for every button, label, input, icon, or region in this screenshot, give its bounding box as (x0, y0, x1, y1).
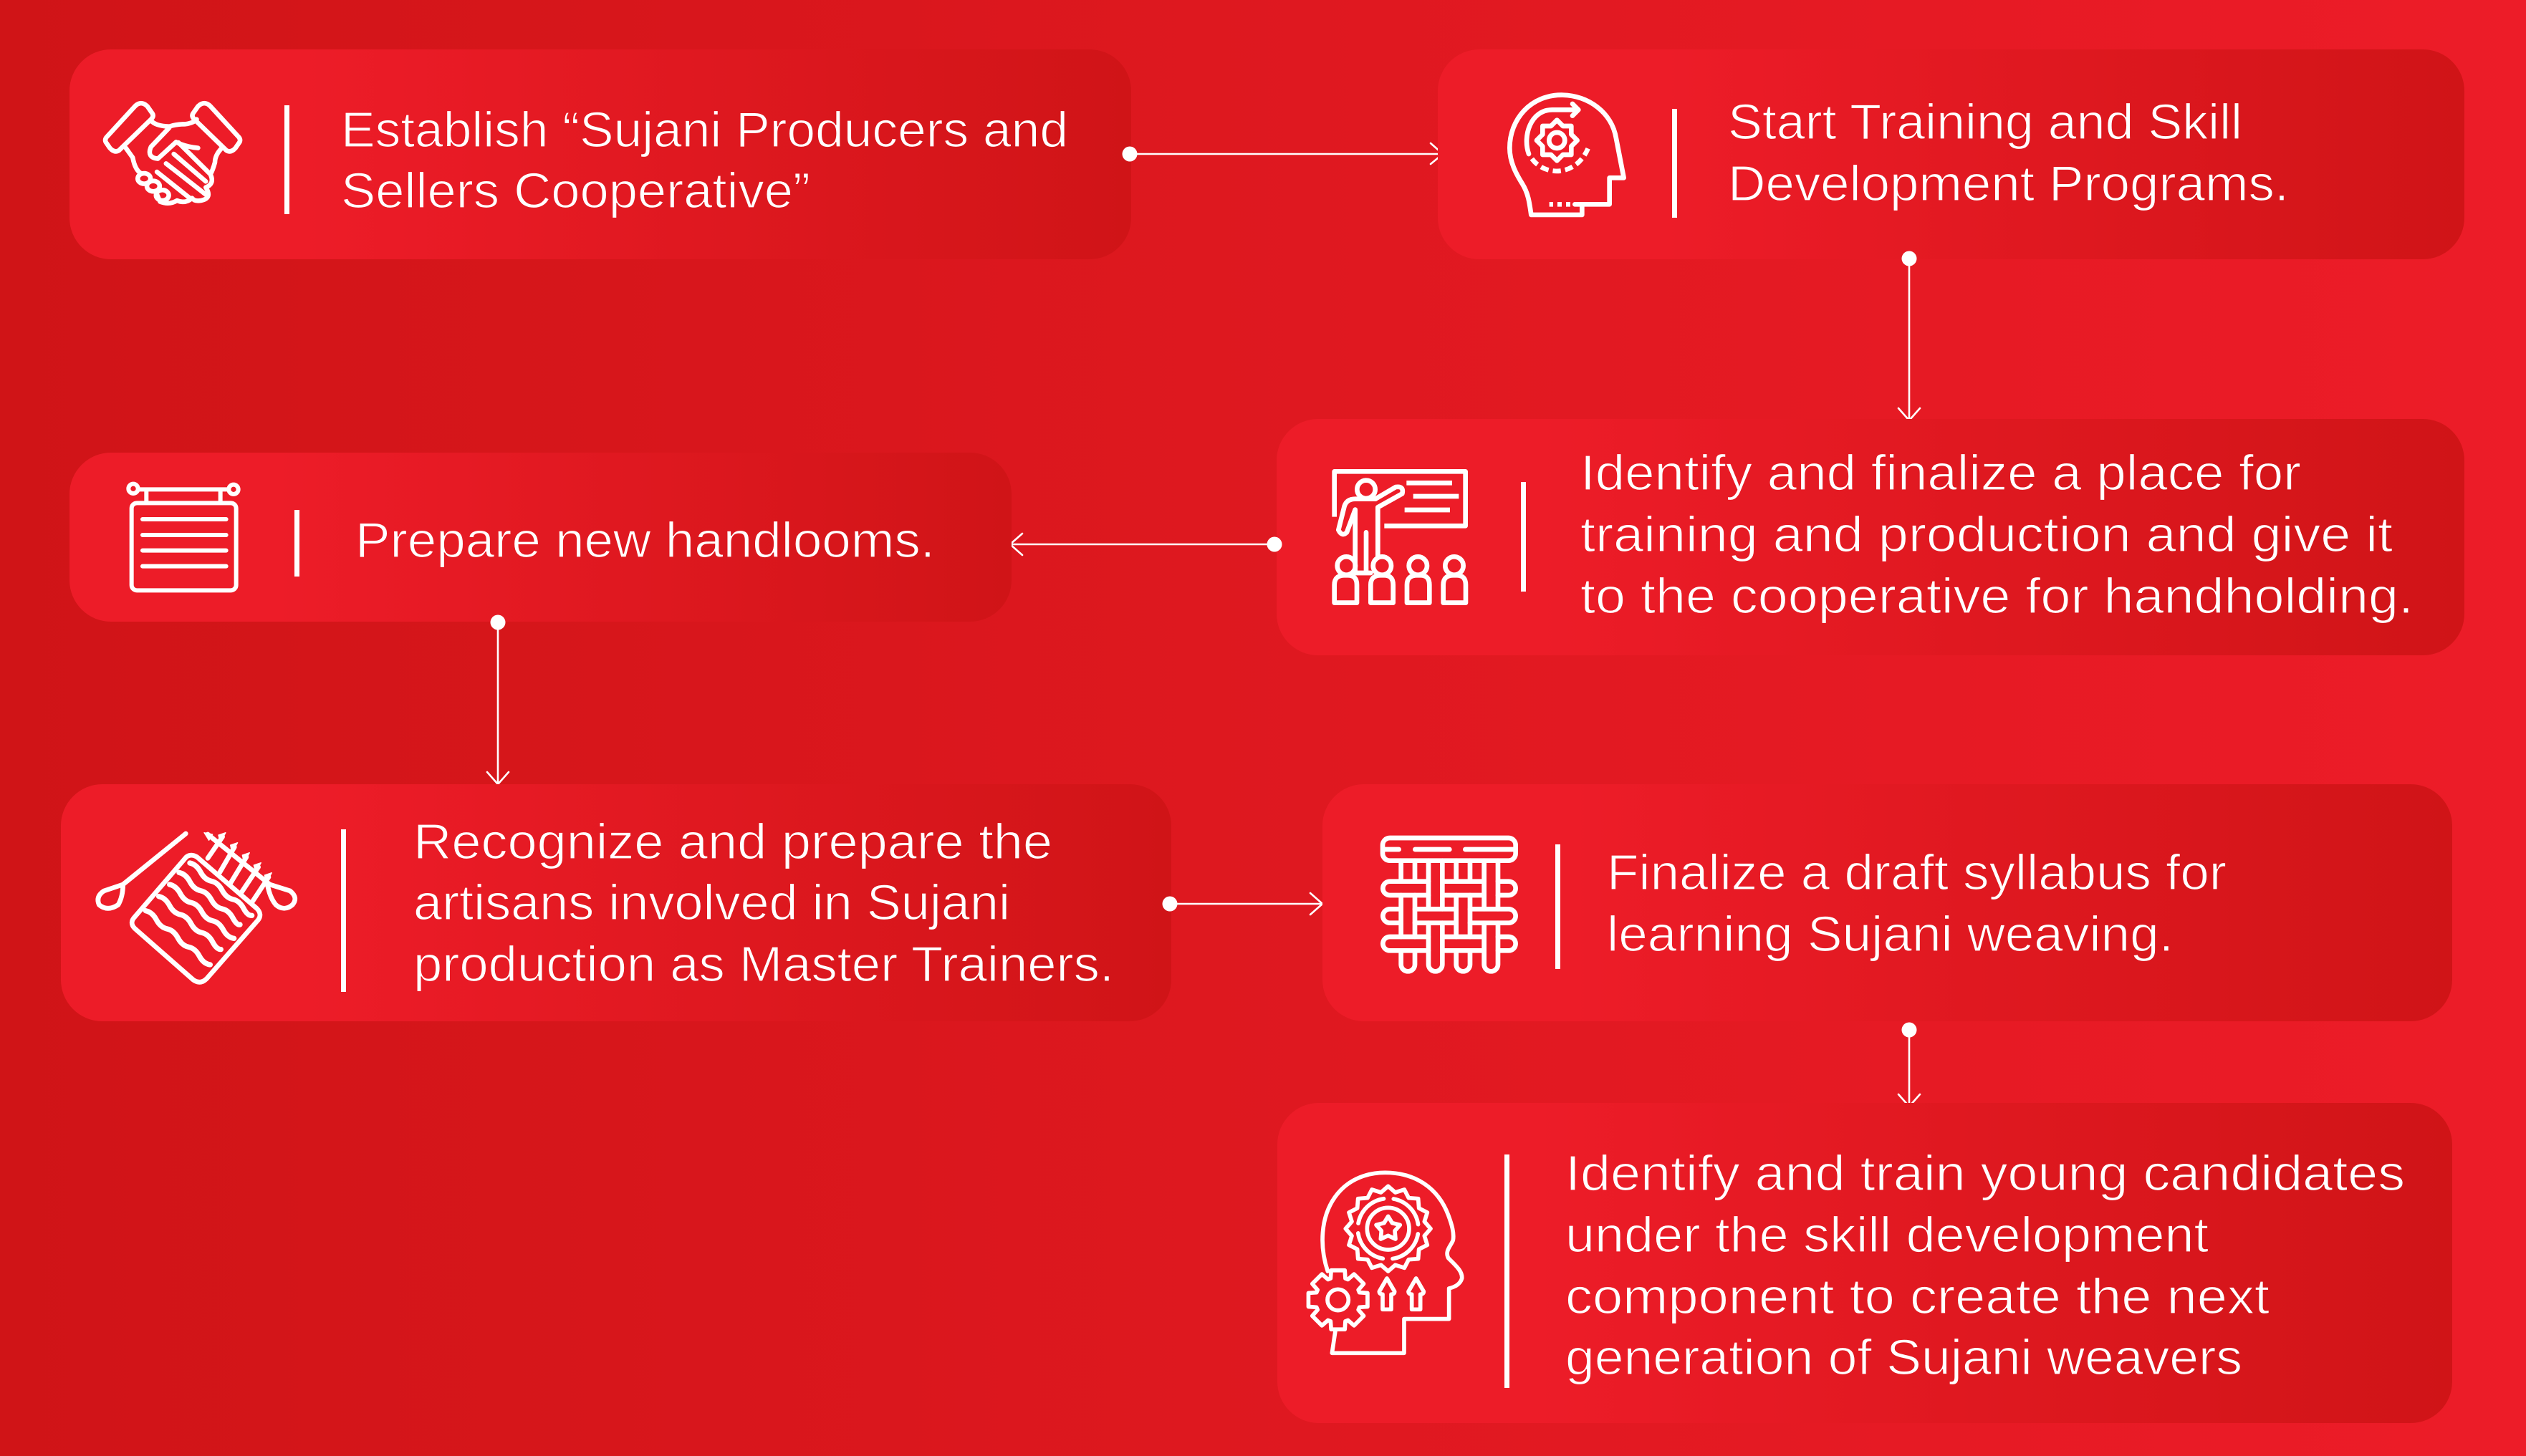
panel: training programs (1438, 49, 2464, 259)
arrow: training to place (1898, 251, 1920, 420)
arrow: syllabus to candidates (1898, 1023, 1920, 1107)
panel: master trainers (61, 784, 1171, 1021)
text: identify place (1580, 445, 2414, 624)
text: master trainers: Recognize and prepare the (413, 814, 1052, 869)
icon: head with badge and gear (1308, 1172, 1462, 1353)
panel background (1277, 1103, 2452, 1423)
text: master trainers (413, 814, 1114, 992)
panel: establish cooperative (69, 49, 1131, 259)
text: identify place: to the cooperative for handholding. (1580, 568, 2414, 624)
text: master trainers: production as Master Trainers. (413, 936, 1114, 992)
text: training programs: Start Training and Skill (1728, 94, 2242, 150)
panel background (1277, 419, 2464, 655)
icon: handshake (105, 103, 240, 203)
arrow: place to handlooms (1010, 534, 1282, 555)
icon: trainer with audience (1335, 471, 1466, 603)
text: young candidates: under the skill development (1565, 1207, 2209, 1263)
text: young candidates: generation of Sujani weavers (1565, 1329, 2242, 1385)
text: identify place: training and production and give it (1580, 506, 2393, 562)
text: young candidates (1565, 1145, 2405, 1385)
text: young candidates: Identify and train young candidates (1565, 1145, 2405, 1201)
icon: hanging board (128, 484, 239, 590)
panel background (1322, 784, 2452, 1021)
text: new handlooms: Prepare new handlooms. (355, 512, 935, 568)
icon: weave (1383, 838, 1516, 971)
text: establish cooperative: Establish “Sujani Producers and (341, 102, 1068, 158)
arrow: artisans to syllabus (1162, 893, 1322, 915)
panel background (61, 784, 1171, 1021)
text: establish cooperative: Sellers Cooperative” (341, 163, 810, 218)
icon: head with gear (1509, 95, 1624, 215)
arrow: establish to training (1122, 143, 1443, 164)
text: master trainers: artisans involved in Sujani (413, 874, 1010, 930)
panel: identify place (1277, 419, 2464, 655)
text: young candidates: component to create the next (1565, 1268, 2270, 1324)
text: training programs: Development Programs. (1728, 155, 2289, 211)
icon: knitting (98, 833, 295, 982)
panel background (1438, 49, 2464, 259)
panel: young candidates (1277, 1103, 2452, 1423)
arrow: handlooms to artisans (487, 614, 509, 784)
panel: new handlooms (69, 453, 1012, 622)
panel background (69, 49, 1131, 259)
text: draft syllabus: Finalize a draft syllabus for (1607, 844, 2227, 900)
panel: draft syllabus (1322, 784, 2452, 1021)
text: establish cooperative (341, 102, 1068, 218)
text: identify place: Identify and finalize a place for (1580, 445, 2301, 501)
text: draft syllabus (1607, 844, 2227, 962)
panel background (69, 453, 1012, 622)
text: training programs (1728, 94, 2289, 211)
text: draft syllabus: learning Sujani weaving. (1607, 906, 2174, 962)
